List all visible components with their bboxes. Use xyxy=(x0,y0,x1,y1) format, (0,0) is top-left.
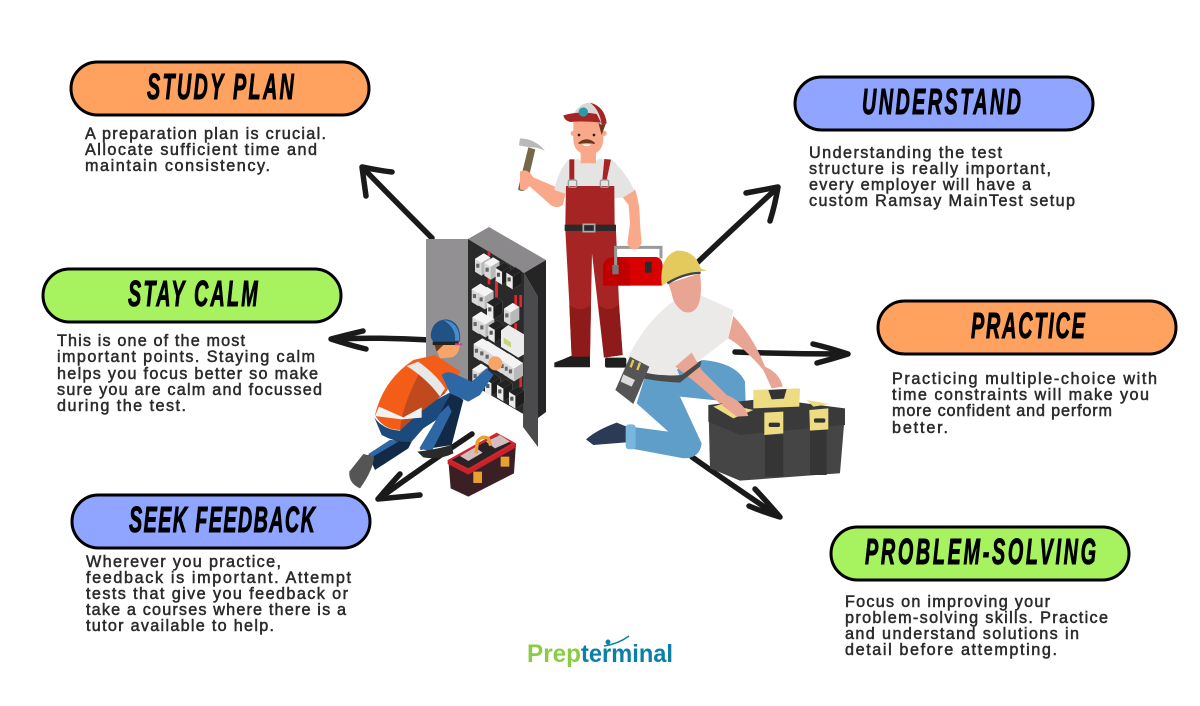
arrow: to problem-solving xyxy=(692,457,780,517)
illustration: electrical cabinet xyxy=(426,227,546,447)
hand on toolbox xyxy=(722,395,748,417)
panel: stay calm xyxy=(43,269,341,415)
illustration: kneeling worker at cabinet xyxy=(349,319,516,497)
body text: take a courses where there is a xyxy=(86,601,346,619)
panel: study plan xyxy=(71,62,369,175)
head xyxy=(668,273,701,312)
body text: Focus on improving your xyxy=(845,593,1051,611)
right arm xyxy=(623,189,642,248)
pill xyxy=(72,495,370,548)
hammer xyxy=(518,138,545,191)
body text: detail before attempting. xyxy=(845,641,1057,659)
illustration: worker with hammer and red toolbox xyxy=(518,103,663,368)
boots xyxy=(554,356,626,368)
belt xyxy=(565,224,616,232)
heading: UNDERSTAND xyxy=(862,83,1021,123)
body text: time constraints will make you xyxy=(892,386,1149,404)
shoe xyxy=(586,423,627,445)
pill xyxy=(831,527,1129,580)
body text: maintain consistency. xyxy=(85,157,270,175)
overall bib xyxy=(565,159,615,225)
logo: Prepterminal xyxy=(527,636,673,668)
body text: custom Ramsay MainTest setup xyxy=(809,192,1075,210)
body text: tutor available to help. xyxy=(86,617,274,635)
black toolbox xyxy=(708,388,845,481)
body text: This is one of the most xyxy=(57,332,246,350)
cabinet breakers xyxy=(472,251,524,409)
heading: STUDY PLAN xyxy=(147,68,295,108)
body text: during the test. xyxy=(57,397,186,415)
orange vest xyxy=(375,355,461,431)
heading: SEEK FEEDBACK xyxy=(129,501,316,541)
body text: sure you are calm and focussed xyxy=(57,381,322,399)
body text xyxy=(845,593,1108,659)
pill xyxy=(43,269,341,322)
belt and pouch xyxy=(615,357,702,404)
arrow: to understand xyxy=(698,187,778,262)
panel: understand xyxy=(795,77,1093,210)
body text: better. xyxy=(892,419,948,437)
arms xyxy=(675,316,783,417)
trousers xyxy=(565,230,623,358)
body text xyxy=(86,553,352,635)
body text: A preparation plan is crucial. xyxy=(85,125,326,143)
body text: important points. Staying calm xyxy=(57,348,315,366)
heading: STAY CALM xyxy=(128,275,258,315)
hand xyxy=(488,356,502,370)
head xyxy=(571,122,607,163)
body text: tests that give you feedback or xyxy=(86,585,349,603)
body text: every employer will have a xyxy=(809,176,1031,194)
body text: Allocate sufficient time and xyxy=(85,141,317,159)
body text: helps you focus better so make xyxy=(57,365,318,383)
body text: Understanding the test xyxy=(809,144,1002,162)
body text: structure is really important, xyxy=(809,160,1051,178)
body text xyxy=(57,332,322,415)
heading: PROBLEM-SOLVING xyxy=(865,533,1096,573)
pill xyxy=(71,62,369,115)
logo: Prepterminal: Prep xyxy=(527,640,581,668)
t-shirt xyxy=(628,295,733,377)
panel: practice xyxy=(878,301,1176,437)
logo: Prepterminal: terminal xyxy=(581,640,673,668)
arrow: to seek feedback xyxy=(378,434,472,499)
shoes xyxy=(349,445,453,488)
body text xyxy=(892,370,1157,437)
body text xyxy=(85,125,326,175)
head and cap xyxy=(431,319,462,358)
body text: more confident and perform xyxy=(892,402,1112,420)
body text: Practicing multiple-choice with xyxy=(892,370,1157,388)
pill xyxy=(795,77,1093,130)
panel: problem-solving xyxy=(831,527,1129,659)
arrow: to study plan xyxy=(362,167,432,238)
sleeve xyxy=(442,368,493,402)
yellow helmet xyxy=(661,251,707,286)
small toolbox xyxy=(448,433,516,497)
body text: Wherever you practice, xyxy=(86,553,281,571)
cap xyxy=(563,103,607,125)
panel: seek feedback xyxy=(72,495,370,635)
jeans xyxy=(626,360,746,458)
body text xyxy=(809,144,1075,210)
hand on toolbox xyxy=(628,236,641,249)
body text: feedback is important. Attempt xyxy=(86,569,352,587)
shirt xyxy=(554,159,634,198)
body text: problem-solving skills. Practice xyxy=(845,609,1108,627)
body text: and understand solutions in xyxy=(845,625,1079,643)
heading: PRACTICE xyxy=(971,307,1086,347)
arrow: to stay calm xyxy=(331,331,430,349)
red toolbox xyxy=(603,247,663,286)
arrow: to practice xyxy=(735,344,848,363)
pill xyxy=(878,301,1176,354)
left arm xyxy=(520,170,567,207)
trousers xyxy=(368,392,463,470)
illustration: worker in yellow helmet with black toolbox xyxy=(586,251,845,481)
